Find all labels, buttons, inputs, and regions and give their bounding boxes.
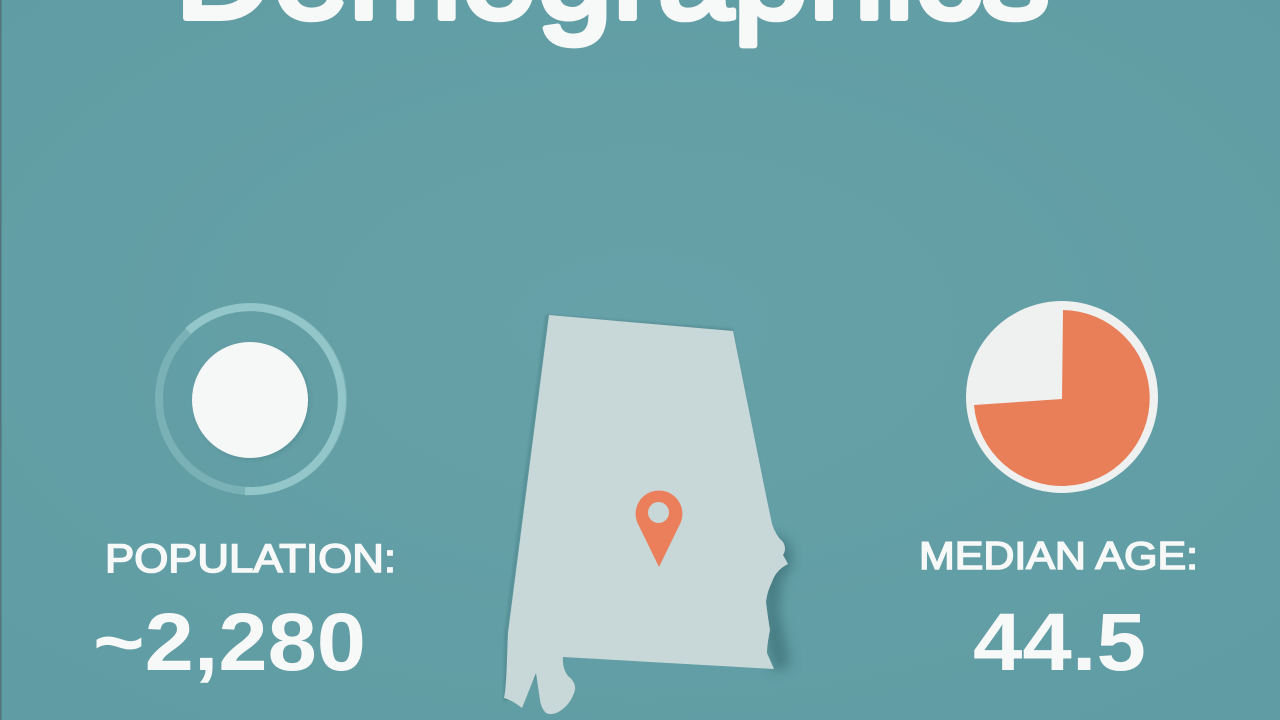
panel: median age <box>919 301 1198 688</box>
icon: location pin <box>636 490 682 567</box>
population value: ~2,280 <box>93 597 366 688</box>
panel: map of Alabama <box>504 315 792 714</box>
population label: POPULATION: <box>105 537 396 581</box>
icon: median age pie chart <box>966 301 1158 493</box>
panel: population <box>93 307 396 688</box>
map shadow <box>760 533 792 672</box>
icon: population ring and circle <box>159 307 343 491</box>
map: state outline <box>504 315 788 714</box>
median age label: MEDIAN AGE: <box>919 535 1198 578</box>
median age value: 44.5 <box>973 597 1146 688</box>
